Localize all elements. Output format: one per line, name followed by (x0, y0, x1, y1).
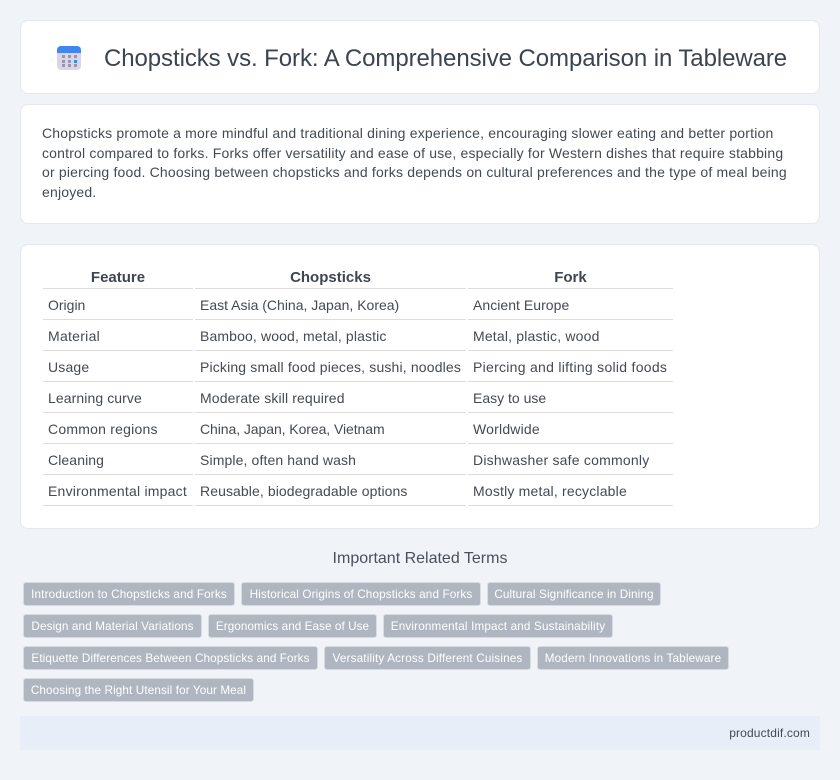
intro text: Chopsticks promote a more mindful and traditional dining experience, encouraging slower eating and better portion (42, 125, 773, 141)
footer bar (20, 716, 820, 750)
related terms tags: Versatility Across Different Cuisines (333, 652, 522, 665)
table card (20, 244, 820, 529)
intro text: control compared to forks. Forks offer versatility and ease of use, especially for Western dishes that require stabbing (42, 145, 783, 161)
footer source: productdif.com (729, 726, 810, 740)
comparison table: China, Japan, Korea, Vietnam (200, 421, 385, 437)
comparison table: Piercing and lifting solid foods (473, 359, 667, 375)
intro text: enjoyed. (42, 184, 96, 200)
related terms tags: Choosing the Right Utensil for Your Meal (31, 684, 246, 697)
comparison table: Cleaning (48, 452, 104, 468)
comparison table: Chopsticks (290, 269, 371, 286)
icon: calendar (57, 46, 81, 70)
comparison table: Material (48, 328, 100, 344)
related terms tags: Cultural Significance in Dining (494, 588, 654, 601)
related terms tags: Ergonomics and Ease of Use (216, 620, 369, 633)
related terms heading: Important Related Terms (333, 550, 507, 567)
comparison table: Fork (554, 269, 587, 286)
related terms tags: Modern Innovations in Tableware (545, 652, 721, 665)
comparison table: Moderate skill required (200, 390, 345, 406)
comparison table: Mostly metal, recyclable (473, 483, 627, 499)
comparison table: Easy to use (473, 390, 546, 406)
comparison table: Simple, often hand wash (200, 452, 356, 468)
comparison table: Ancient Europe (473, 297, 569, 313)
comparison table: Metal, plastic, wood (473, 328, 600, 344)
comparison table: Reusable, biodegradable options (200, 483, 408, 499)
comparison table: Common regions (48, 421, 158, 437)
comparison table: Bamboo, wood, metal, plastic (200, 328, 387, 344)
related terms tags: Environmental Impact and Sustainability (391, 620, 605, 633)
comparison table: Dishwasher safe commonly (473, 452, 649, 468)
related terms tags: Design and Material Variations (31, 620, 194, 633)
intro text: or piercing food. Choosing between chopsticks and forks depends on cultural preferences and the type of meal being (42, 164, 787, 180)
related terms tags: Historical Origins of Chopsticks and Forks (250, 588, 472, 601)
comparison table: Learning curve (48, 390, 142, 406)
comparison table: Usage (48, 359, 89, 375)
comparison table: Origin (48, 297, 85, 313)
related terms tags: Introduction to Chopsticks and Forks (31, 588, 227, 601)
related terms tags: Etiquette Differences Between Chopsticks and Forks (31, 652, 310, 665)
title: Chopsticks vs. Fork: A Comprehensive Comparison in Tableware (104, 45, 787, 72)
comparison table (43, 269, 673, 506)
title card (20, 20, 820, 94)
comparison table: Environmental impact (48, 483, 187, 499)
comparison table: Feature (91, 269, 145, 286)
comparison table: Worldwide (473, 421, 540, 437)
comparison table: Picking small food pieces, sushi, noodles (200, 359, 461, 375)
comparison table: East Asia (China, Japan, Korea) (200, 297, 399, 313)
related terms tags (23, 582, 729, 702)
intro text (42, 125, 787, 200)
intro card (20, 104, 820, 224)
